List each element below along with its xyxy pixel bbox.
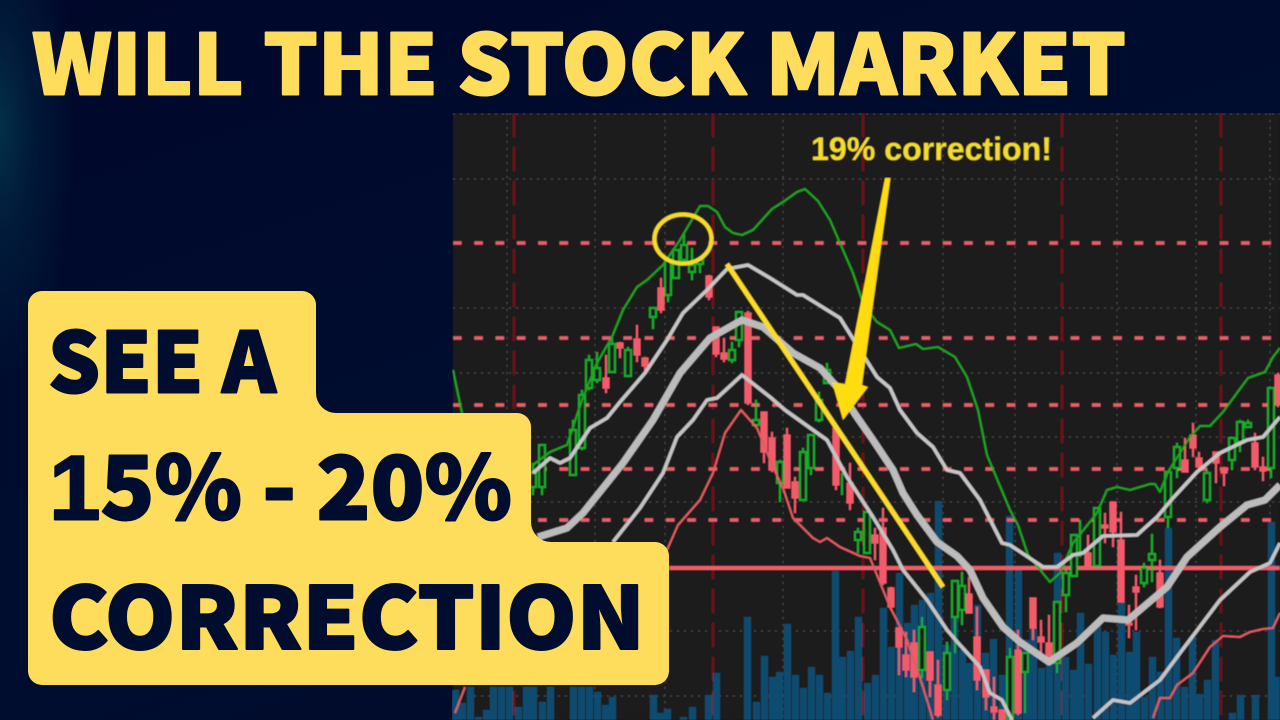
annotation: 19% correction: 19% correction! — [811, 131, 1052, 167]
callout line: correction: CORRECTION — [49, 549, 645, 674]
horizontal level lines — [453, 243, 1280, 568]
yellow trend line — [727, 264, 943, 587]
circle: market top highlight — [654, 214, 712, 264]
lower red band line — [455, 410, 1280, 720]
callout background — [28, 291, 669, 685]
volume bars — [452, 501, 1280, 720]
red candles — [603, 275, 1280, 720]
callout line: see a: SEE A — [48, 296, 277, 416]
upper green band line — [453, 189, 1280, 582]
callout line: percentage range: 15% - 20% — [49, 418, 512, 546]
lower moving average line — [613, 375, 1012, 720]
arrow: correction pointer — [832, 178, 890, 420]
title: WILL THE STOCK MARKET — [32, 0, 1126, 118]
green candles — [530, 233, 1274, 720]
callout panel — [28, 291, 669, 685]
thick middle moving average line — [538, 320, 1280, 662]
upper moving average line — [533, 265, 1280, 567]
chart panel — [452, 113, 1280, 720]
chart background — [453, 113, 1280, 720]
